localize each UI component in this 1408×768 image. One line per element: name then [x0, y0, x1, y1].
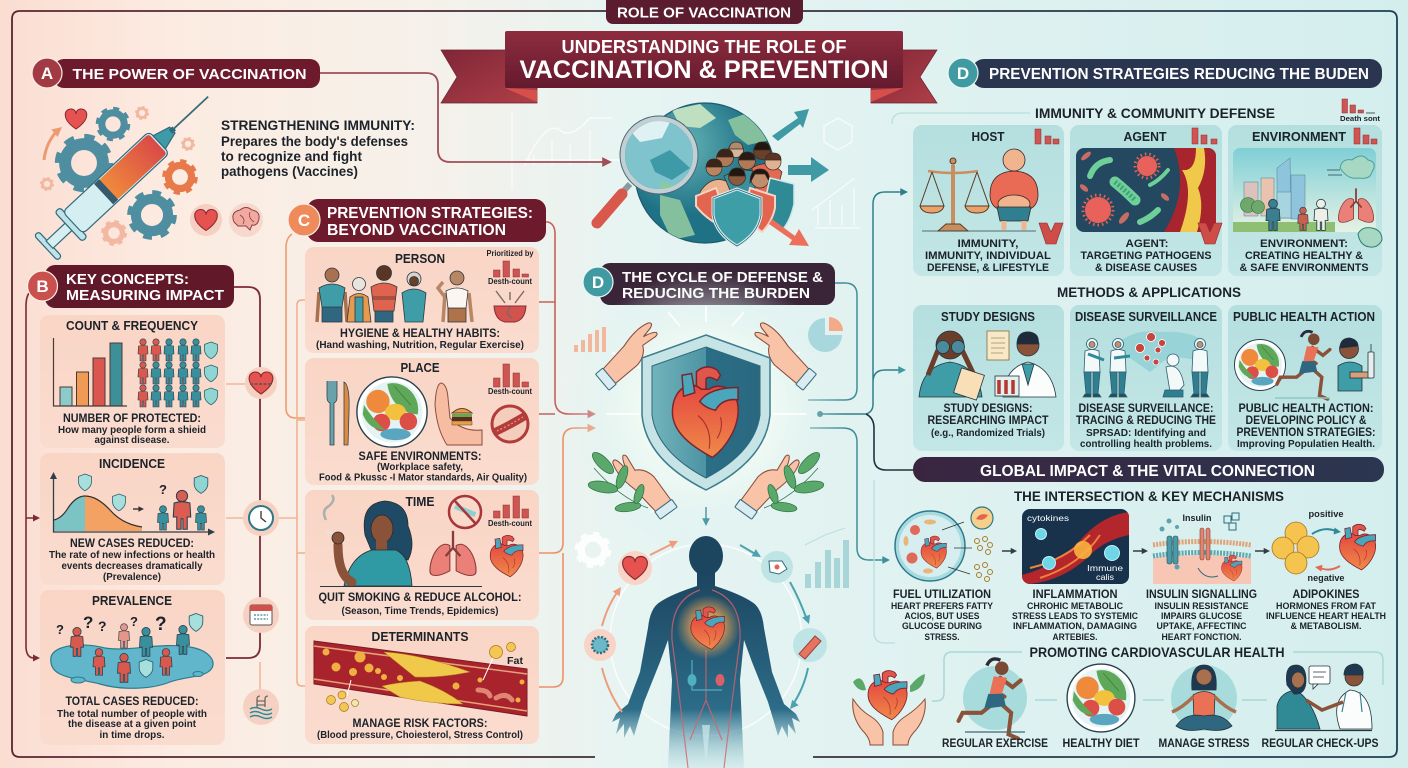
icon: cell with heart: [895, 507, 993, 582]
panel: time: QUIT SMOKING & REDUCE ALCOHOL:: [318, 590, 522, 604]
mechanism: adipokines: positive: [1308, 509, 1344, 519]
section D: cycle header: D: [592, 273, 604, 292]
text: strengthening immunity: to recognize and fight: [221, 149, 363, 164]
mechanism: fuel utilization: GLUCOSE DURING: [902, 621, 982, 632]
pool with people: ?: [83, 613, 93, 632]
panel: determinants: MANAGE RISK FACTORS:: [352, 716, 488, 730]
icon: lungs: [1338, 188, 1374, 222]
promotion: healthy diet: [1062, 664, 1140, 750]
illustration: human body with heart: [610, 536, 802, 768]
icon: broken vessel: [1198, 223, 1222, 244]
panel: determinants: (Blood pressure, Choiesterol, Stress Control): [317, 729, 523, 741]
heading: intersection & key mechanisms: THE INTERSECTION & KEY MECHANISMS: [1014, 489, 1284, 504]
panel: study designs: [913, 305, 1064, 451]
top tag: role of vaccination: ROLE OF VACCINATION: [617, 6, 791, 22]
panel: agent: AGENT:: [1126, 238, 1168, 250]
panel: environment: ENVIRONMENT: [1252, 130, 1346, 144]
incidence curve chart: [50, 472, 215, 536]
panel: environment: [1228, 125, 1382, 276]
icon: healthy plate: [357, 377, 427, 447]
panel: place: PLACE: [400, 361, 440, 375]
mechanism: adipokines: ADIPOKINES: [1292, 589, 1360, 601]
mechanism: inflammation: INFLAMMATION, DAMAGING: [1013, 621, 1137, 632]
title banner: VACCINATION & PREVENTION: [520, 56, 888, 84]
legend: death count bars: [1340, 99, 1381, 123]
connectors: section B: [26, 287, 297, 692]
arrow: A to globe: [320, 73, 612, 167]
panel: disease surveillance: SPRSAD: Identifying and: [1086, 427, 1206, 439]
panel: prevalence: TOTAL CASES REDUCED:: [66, 696, 198, 708]
section D: cycle header: THE CYCLE OF DEFENSE &: [622, 269, 823, 286]
faint chart decorations near globe: [512, 112, 860, 228]
mechanism: adipokines: INFLUENCE HEART HEALTH: [1266, 611, 1386, 622]
panel: person: (Hand washing, Nutrition, Regular Exercise): [316, 339, 524, 351]
panel: environment: ENVIRONMENT:: [1260, 238, 1348, 250]
panel: time: Desth-count: [488, 519, 532, 528]
section A header: [32, 58, 320, 88]
promotion: regular check-ups: REGULAR CHECK-UPS: [1262, 738, 1379, 750]
pool with people: ?: [56, 622, 64, 637]
connectors: section C: [286, 222, 596, 687]
mechanism: fuel utilization: STRESS.: [924, 632, 960, 643]
mechanism: insulin signalling: INSULIN SIGNALLING: [1146, 589, 1257, 601]
illustration: pathogens: [1076, 148, 1216, 232]
illustration: plate, runner, vaccine: [1234, 331, 1374, 399]
panel: public health action: PUBLIC HEALTH ACTION:: [1238, 403, 1374, 415]
section A header: A: [41, 64, 53, 83]
panel: prevalence: The total number of people with: [57, 709, 207, 720]
panel: determinants: Fat: [507, 655, 524, 667]
illustration: fat cells and heart: [1272, 522, 1376, 574]
promotion: manage stress: MANAGE STRESS: [1158, 738, 1250, 750]
mechanism: inflammation: [1012, 509, 1148, 643]
panel: environment: CREATING HEALTHY &: [1245, 250, 1363, 262]
icon: broken vessel: [1039, 223, 1063, 244]
panel: incidence: [40, 453, 225, 585]
illustration: field team on map: [1083, 331, 1209, 397]
arrow: [1002, 548, 1017, 554]
mechanism: adipokines: [1266, 509, 1386, 632]
panel: place: [305, 358, 539, 485]
panel: time: [305, 490, 539, 620]
panel: incidence: (Prevalence): [103, 572, 161, 583]
panel: disease surveillance: [1070, 305, 1222, 451]
arrows out of globe: [769, 109, 829, 246]
pool with people: ?: [98, 618, 107, 634]
illustration: overweight man: [922, 149, 1038, 231]
panel: count & frequency: [40, 315, 225, 448]
panel: study designs: STUDY DESIGNS:: [944, 403, 1032, 415]
promotion: regular check-ups: [1262, 664, 1379, 750]
mechanism: inflammation: calis: [1096, 572, 1114, 582]
section D: cycle header: REDUCING THE BURDEN: [622, 285, 810, 302]
panel: incidence: The rate of new infections or health: [49, 550, 215, 561]
icon: fork and knife: [327, 381, 349, 445]
panel: time: (Season, Time Trends, Epidemics): [342, 605, 498, 617]
panel: agent: AGENT: [1124, 130, 1167, 144]
panel: disease surveillance: controlling health problems.: [1080, 438, 1212, 450]
mechanism: inflammation: Immune: [1087, 563, 1123, 573]
text: strengthening immunity: STRENGTHENING IMMUNITY:: [221, 118, 415, 133]
panel: host: DEFENSE, & LIFESTYLE: [927, 262, 1049, 274]
icon: stop hand and burger: [435, 383, 482, 445]
panel: public health action: Improving Populatien Health.: [1237, 438, 1375, 450]
panel: prevalence: [40, 590, 225, 745]
glow rays: [606, 306, 806, 512]
text: strengthening immunity: [221, 118, 415, 179]
panel: agent: TARGETING PATHOGENS: [1080, 250, 1212, 262]
heading: immunity & community defense: IMMUNITY & COMMUNITY DEFENSE: [1035, 105, 1275, 121]
panel: disease surveillance: DISEASE SURVEILLANCE: [1075, 310, 1217, 324]
section B header: KEY CONCEPTS:: [66, 272, 189, 288]
mechanism: inflammation: CHROHIC METABOLIC: [1027, 601, 1123, 612]
section D: prevention header: D: [957, 64, 969, 83]
icon: heart in hands: [853, 671, 925, 745]
cycle icons and arrows: [584, 537, 827, 712]
panel: disease surveillance: TRACING & REDUCING THE: [1076, 415, 1216, 427]
mechanism: insulin signalling: UPTAKE, AFFECTINC: [1156, 621, 1247, 632]
panel: person: Desth-count: [488, 277, 532, 286]
panel: person: PERSON: [395, 252, 445, 266]
mechanism: insulin signalling: [1146, 513, 1270, 643]
mechanism: inflammation: INFLAMMATION: [1032, 589, 1118, 601]
panel: place: Desth-count: [488, 387, 532, 396]
section B header: [28, 265, 234, 308]
icon: no smoking: [449, 496, 481, 528]
heading: promoting cardiovascular health: PROMOTING CARDIOVASCULAR HEALTH: [1030, 645, 1284, 660]
promotion: regular exercise: REGULAR EXERCISE: [942, 738, 1048, 750]
promotion: regular exercise: [942, 659, 1048, 750]
panel: count & frequency: COUNT & FREQUENCY: [66, 319, 199, 333]
section B header: B: [36, 277, 49, 296]
hands around shield: [591, 321, 821, 523]
section C header: C: [298, 211, 310, 230]
panel: person: Prioritized by: [486, 249, 534, 258]
icon: broken bowl: [494, 291, 526, 322]
panel: study designs: RESEARCHING IMPACT: [928, 415, 1048, 427]
mechanism: fuel utilization: [891, 507, 1017, 643]
artery with fat deposits: [314, 641, 527, 716]
panel: time: TIME: [406, 495, 434, 509]
panel: prevalence: PREVALENCE: [92, 594, 172, 608]
panel: public health action: PREVENTION STRATEGIES:: [1236, 427, 1376, 439]
pool with people: ?: [130, 614, 138, 629]
mechanism: insulin signalling: IMPAIRS GLUCOSE: [1161, 611, 1242, 622]
mechanism: fuel utilization: ACIOS, BUT USES: [904, 611, 980, 622]
legend: death count bars: Death sont: [1340, 114, 1381, 123]
section D: prevention header: [948, 58, 1382, 88]
mini bars: [494, 364, 528, 387]
section D: cycle header: [583, 263, 835, 305]
text: strengthening immunity: pathogens (Vaccines): [221, 164, 358, 179]
panel: host: IMMUNITY, INDIVIDUAL: [925, 250, 1051, 262]
glow behind shield: [566, 270, 846, 550]
panel: host: HOST: [972, 130, 1005, 144]
mechanism: insulin signalling: HEART FONCTION.: [1162, 632, 1242, 643]
arrow: shield to body: [702, 507, 710, 526]
mechanism: adipokines: & METABOLISM.: [1290, 621, 1362, 632]
icon: broken heart node: [245, 367, 277, 399]
mechanism: adipokines: HORMONES FROM FAT: [1276, 601, 1376, 612]
illustration: woman smoking: [320, 495, 482, 586]
mini bars: [1192, 128, 1217, 144]
mechanism: adipokines: negative: [1308, 573, 1344, 583]
panel: host: IMMUNITY,: [958, 238, 1018, 250]
mechanism: fuel utilization: FUEL UTILIZATION: [893, 589, 991, 601]
panel: host: [913, 125, 1064, 276]
section D: prevention header: PREVENTION STRATEGIES REDUCING THE BUDEN: [989, 66, 1369, 83]
icon: heart: [490, 535, 523, 577]
panel: environment: & SAFE ENVIRONMENTS: [1240, 262, 1368, 274]
icon: calendar node: [243, 597, 279, 633]
panel: place: Food & Pkussc -I Mator standards, Air Quality): [319, 472, 527, 484]
mini bars: [1035, 129, 1059, 144]
panel: count & frequency: against disease.: [94, 435, 170, 446]
heading bar: global impact: [913, 457, 1384, 482]
arrow: [1255, 548, 1270, 554]
icon: prohibited artery: [492, 406, 528, 442]
illustration: city and park: [1233, 148, 1376, 232]
panel: agent: & DISEASE CAUSES: [1095, 262, 1197, 274]
panel: place: (Workplace safety,: [377, 461, 463, 473]
icon: syringe with gears: [32, 82, 263, 263]
icon: polluted cloud: [1358, 228, 1382, 247]
title banner: [441, 31, 937, 103]
bar chart: [54, 338, 127, 406]
panel: determinants: [305, 626, 539, 744]
promotion: healthy diet: HEALTHY DIET: [1062, 738, 1140, 750]
panel: incidence: NEW CASES REDUCED:: [70, 538, 194, 550]
mini bars: [1354, 128, 1377, 144]
panel: count & frequency: NUMBER OF PROTECTED:: [63, 413, 201, 425]
icon: lungs: [430, 531, 476, 576]
incidence curve chart: ?: [159, 482, 167, 497]
panel: prevalence: in time drops.: [100, 730, 165, 741]
icon: shield with heart: [642, 335, 770, 490]
mini bars: [494, 261, 528, 277]
panel: count & frequency: How many people form a shieid: [58, 425, 206, 436]
section C header: PREVENTION STRATEGIES:: [327, 205, 533, 222]
icon: pool ladder node: [243, 689, 279, 725]
section A header: THE POWER OF VACCINATION: [72, 66, 306, 83]
text: strengthening immunity: Prepares the body's defenses: [221, 134, 408, 149]
people illustration: [317, 266, 472, 322]
icon: clock node: [243, 500, 279, 536]
panel: person: [305, 247, 539, 353]
icon: balance scales: [920, 158, 989, 231]
section C header: [288, 199, 546, 242]
panel: disease surveillance: DISEASE SURVEILLANCE:: [1078, 403, 1214, 415]
illustration: cell membrane: [1153, 513, 1251, 584]
panel: prevalence: the disease at a given point: [68, 719, 197, 730]
panel: incidence: INCIDENCE: [99, 457, 165, 471]
illustration: globe with magnifier, people and shields: [597, 103, 794, 246]
promotion: manage stress: [1158, 665, 1250, 750]
panel: person: HYGIENE & HEALTHY HABITS:: [340, 326, 500, 340]
connectors: section D network: [808, 113, 1030, 643]
mechanism: insulin signalling: INSULIN RESISTANCE: [1154, 601, 1248, 612]
pool with people: ?: [155, 614, 167, 635]
leaves: [587, 449, 825, 513]
arrow: [1133, 548, 1148, 554]
panel: agent: [1070, 125, 1222, 276]
panel: public health action: DEVELOPINC POLICY &: [1246, 415, 1366, 427]
panel: study designs: STUDY DESIGNS: [941, 310, 1035, 324]
heading bar: global impact: GLOBAL IMPACT & THE VITAL CONNECTION: [980, 463, 1315, 480]
section C header: BEYOND VACCINATION: [327, 222, 506, 239]
section B header: MEASURING IMPACT: [66, 288, 224, 304]
mechanism: inflammation: cytokines: [1027, 513, 1069, 523]
illustration: inflamed artery: [1022, 509, 1129, 584]
panel: public health action: [1228, 305, 1382, 451]
mechanism: inflammation: ARTEBIES.: [1052, 632, 1098, 643]
title banner: UNDERSTANDING THE ROLE OF: [562, 37, 846, 57]
panel: place: SAFE ENVIRONMENTS:: [358, 449, 482, 463]
pool with people: [51, 613, 213, 688]
panel: determinants: DETERMINANTS: [372, 630, 468, 644]
panel: public health action: PUBLIC HEALTH ACTION: [1233, 310, 1375, 324]
top tag: role of vaccination: [606, 0, 803, 24]
illustration: researcher and scientist: [919, 331, 1056, 400]
mechanism: insulin signalling: Insulin: [1182, 513, 1212, 523]
people grid: [138, 339, 217, 407]
panel: incidence: events decreases dramatically: [62, 561, 203, 572]
faint decorative charts: [574, 317, 849, 588]
mini bars: [494, 496, 528, 518]
heading: methods & applications: METHODS & APPLICATIONS: [1057, 285, 1241, 300]
panel: study designs: (e.g., Randomized Trials): [931, 427, 1045, 439]
mechanism: fuel utilization: HEART PREFERS FATTY: [891, 601, 994, 612]
mechanism: inflammation: STRESS LEADS TO SYSTEMIC: [1012, 611, 1138, 622]
connector: promoting panel outline: [932, 652, 1383, 701]
